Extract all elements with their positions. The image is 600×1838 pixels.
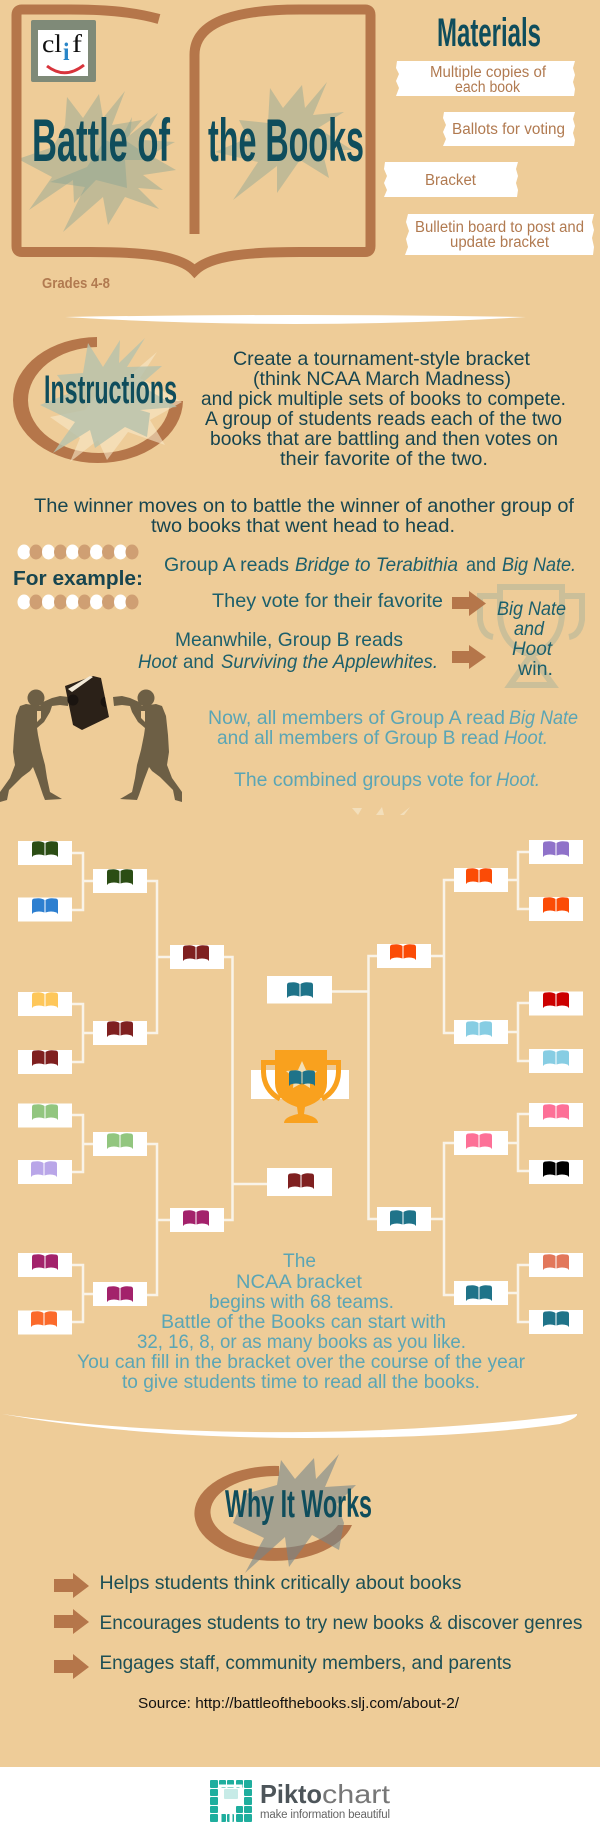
logo tagline: make information beautiful: [260, 1809, 390, 1821]
text: group A reads: [164, 554, 576, 576]
text: winners: [497, 598, 566, 680]
round 3 left: maroon: [170, 945, 224, 969]
round 2 left: green: [93, 1132, 147, 1156]
divider swoosh top: [65, 315, 526, 324]
round 1 left: orange: [18, 1310, 72, 1334]
text: winners: Big Nate: [497, 598, 566, 620]
reason 1: Helps students think critically about books: [100, 1572, 462, 1594]
text: group A reads: and: [466, 554, 496, 576]
text: group reads and combined vote: Hoot.: [504, 727, 548, 749]
grade label: Grades 4-8: [42, 275, 110, 292]
material: multiple copies: Multiple copies of: [430, 64, 547, 81]
text block: winner moves on: [34, 495, 575, 537]
round 1 right: teal: [529, 1310, 583, 1334]
title: the Books: the Books: [208, 107, 364, 174]
round 1 left: blue: [18, 898, 72, 922]
title: Battle of: Battle of: [32, 107, 171, 174]
text: group A reads: Bridge to Terabithia: [295, 554, 458, 576]
starburst right: [215, 82, 352, 200]
round 3 left: magenta: [170, 1208, 224, 1232]
divider swoosh bottom: [2, 1414, 577, 1438]
logo: CLiF: i: [63, 39, 70, 66]
text block: winner moves on: two books that went head to head.: [151, 515, 455, 537]
star: [233, 1454, 356, 1573]
illustration: boxers with book: [0, 676, 182, 802]
round 2 right: pink: [454, 1131, 508, 1155]
instructions heading text: Instructions: [44, 368, 177, 412]
reason 3: Engages staff, community members, and parents: [100, 1652, 512, 1674]
book: [65, 676, 109, 730]
logo: CLiF: [31, 20, 96, 82]
text: group A reads: Big Nate.: [502, 554, 576, 576]
round 1 right: red: [529, 992, 583, 1016]
why it works text: Why It Works: [225, 1483, 372, 1526]
text: winners: win.: [517, 658, 553, 680]
panel: materials: [384, 11, 594, 255]
material: bulletin board: [405, 214, 594, 255]
source line: Source: http://battleofthebooks.slj.com/about-2/: [138, 1695, 460, 1712]
for example text: For example:: [13, 567, 143, 590]
logo: CLiF: cl: [42, 31, 62, 58]
round 1 left: yellow: [18, 992, 72, 1016]
text block: instructions intro: books that are battling and then votes on: [210, 428, 558, 450]
text: group B reads: Surviving the Applewhites.: [221, 651, 438, 673]
round 1 right: pink: [529, 1103, 583, 1127]
arrow: group B: [452, 645, 486, 669]
round 1 left: magenta: [18, 1253, 72, 1277]
round 1 right: light blue: [529, 1049, 583, 1073]
material: ballots: [443, 112, 575, 146]
text: winners: Hoot: [512, 638, 554, 660]
text: NCAA bracket note: The: [283, 1250, 316, 1272]
round 2 right: light blue: [454, 1020, 508, 1044]
text: NCAA bracket note: 32, 16, 8, or as many books as you like.: [137, 1331, 466, 1353]
text: group reads and combined vote: Big Nate: [509, 707, 578, 729]
text block: instructions intro: (think NCAA March Madness): [253, 368, 511, 390]
round 2 left: dark green: [93, 869, 147, 893]
logo mark: [210, 1780, 252, 1822]
boxer left: [0, 690, 69, 802]
text: winners: and: [514, 618, 545, 640]
icon: pale trophy: [480, 587, 582, 685]
boxer right: [113, 690, 182, 802]
material: bracket: [384, 162, 518, 197]
round 3 right: teal: [377, 1207, 431, 1231]
text block: instructions intro: A group of students reads each of the two: [205, 408, 562, 430]
material: multiple copies: each book: [455, 79, 520, 96]
text: group reads and combined vote: [208, 707, 578, 791]
logo: CLiF: f: [72, 31, 83, 58]
heading badge: instructions: [13, 337, 183, 463]
material: bulletin board: update bracket: [450, 234, 550, 251]
heading badge: why it works: [194, 1454, 372, 1573]
text: group B reads: and: [183, 651, 214, 673]
text: NCAA bracket note: to give students time to read all the books.: [122, 1371, 480, 1393]
round 3 right: orange: [377, 944, 431, 968]
text block: instructions intro: [201, 348, 566, 470]
dots row bottom: [18, 594, 138, 610]
ring: [194, 1466, 352, 1561]
text: group reads and combined vote: Now, all members of Group A read: [208, 707, 505, 729]
text: group reads and combined vote: and all members of Group B read: [217, 727, 499, 749]
arrow: vote: [452, 591, 486, 616]
text: NCAA bracket note: Battle of the Books can start with: [161, 1311, 446, 1333]
material: bulletin board: Bulletin board to post and: [415, 219, 584, 236]
text block: instructions intro: Create a tournament-style bracket: [233, 348, 531, 370]
header: open book with title: [16, 10, 370, 271]
round 2 right: teal: [454, 1281, 508, 1305]
text: group B reads: Hoot: [138, 651, 178, 673]
dots row top: [18, 544, 138, 560]
ring: [13, 337, 183, 463]
text block: instructions intro: and pick multiple sets of books to compete.: [201, 388, 566, 410]
arrow 1: [54, 1573, 89, 1598]
material: multiple copies: [396, 61, 575, 96]
bracket lines: [72, 852, 529, 1322]
round 1 right: coral: [529, 1253, 583, 1277]
text: group B reads: [138, 629, 438, 673]
text block: instructions intro: their favorite of the two.: [280, 448, 488, 470]
star cream: [50, 352, 182, 462]
text: they vote: They vote for their favorite: [212, 590, 443, 612]
round 1 left: lavender: [18, 1160, 72, 1184]
round 1 right: purple: [529, 840, 583, 864]
text: NCAA bracket note: You can fill in the bracket over the course of the year: [77, 1351, 525, 1373]
book outline: [16, 10, 370, 271]
round 1 right: black: [529, 1160, 583, 1184]
starburst left: [18, 91, 176, 232]
material: ballots: Ballots for voting: [452, 121, 565, 138]
logo wordmark: Piktochart: [260, 1779, 391, 1809]
for example label with dot rows: [13, 544, 143, 610]
round 2 left: maroon: [93, 1021, 147, 1045]
text: group reads and combined vote: Hoot.: [496, 769, 540, 791]
text: group A reads: Group A reads: [164, 554, 289, 576]
footer: [0, 1767, 600, 1838]
arrow 2: [54, 1609, 89, 1634]
text: NCAA bracket note: NCAA bracket: [236, 1271, 363, 1293]
text: group reads and combined vote: The combined groups vote for: [234, 769, 493, 791]
bracket: [18, 840, 583, 1334]
text: NCAA bracket note: [77, 1250, 525, 1393]
round 1 left: green: [18, 1104, 72, 1128]
semifinal: teal: [267, 976, 332, 1004]
semifinal: maroon: [267, 1168, 332, 1196]
round 1 left: maroon: [18, 1050, 72, 1074]
text: group B reads: Meanwhile, Group B reads: [175, 629, 403, 651]
reason 2: Encourages students to try new books & discover genres: [100, 1612, 583, 1634]
champion: trophy with winning book: [251, 1050, 349, 1123]
round 1 right: orange: [529, 897, 583, 921]
reasons list: [54, 1572, 583, 1679]
arrow 3: [54, 1654, 89, 1679]
text: NCAA bracket note: begins with 68 teams.: [209, 1291, 394, 1313]
round 2 right: orange: [454, 868, 508, 892]
round 2 left: magenta: [93, 1282, 147, 1306]
round 1 left: dark green: [18, 841, 72, 865]
text block: winner moves on: The winner moves on to battle the winner of another group of: [34, 495, 575, 517]
star sage: [40, 338, 177, 453]
material: bracket: Bracket: [425, 172, 477, 189]
